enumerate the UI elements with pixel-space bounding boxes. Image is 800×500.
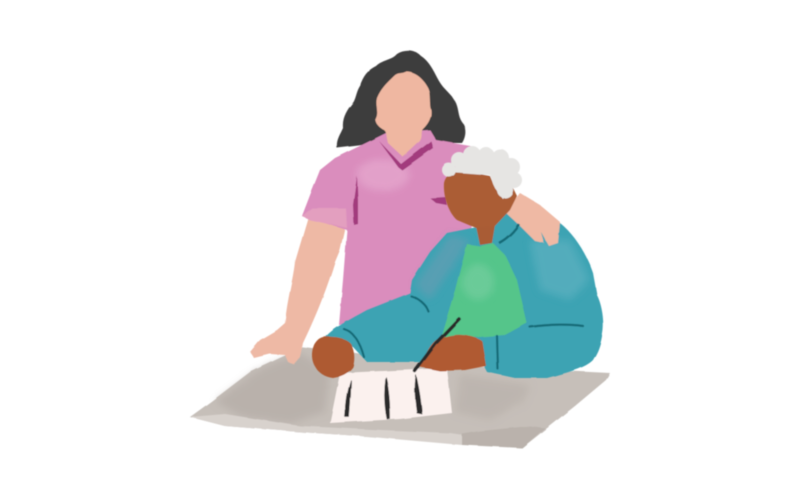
jumper highlight bbox=[462, 264, 494, 300]
hair bbox=[337, 51, 465, 148]
left hand bbox=[312, 337, 354, 378]
jacket bbox=[325, 212, 603, 378]
carer bbox=[250, 51, 480, 364]
shirt highlight bbox=[357, 159, 409, 191]
jacket highlight bbox=[530, 240, 590, 300]
pocket mark bbox=[430, 197, 447, 205]
collar bbox=[379, 141, 433, 170]
pen bbox=[415, 319, 459, 371]
neck bbox=[476, 225, 495, 245]
carer's hand on shoulder bbox=[505, 193, 560, 246]
face and neck bbox=[376, 72, 431, 157]
tally marks bbox=[345, 375, 422, 419]
jacket creases bbox=[344, 296, 583, 369]
older person bbox=[312, 146, 603, 423]
sleeve crease bbox=[353, 176, 358, 225]
collar crease bbox=[499, 224, 519, 243]
paper bbox=[330, 368, 452, 423]
table bbox=[190, 347, 610, 448]
left arm and hand bbox=[250, 218, 345, 364]
white hair bbox=[442, 146, 522, 199]
jumper bbox=[440, 243, 527, 340]
jacket shoulder shade bbox=[415, 235, 470, 300]
shirt sleeve cuff bbox=[302, 208, 347, 228]
head bbox=[444, 170, 517, 228]
shirt bbox=[302, 130, 480, 325]
right hand bbox=[420, 335, 486, 371]
